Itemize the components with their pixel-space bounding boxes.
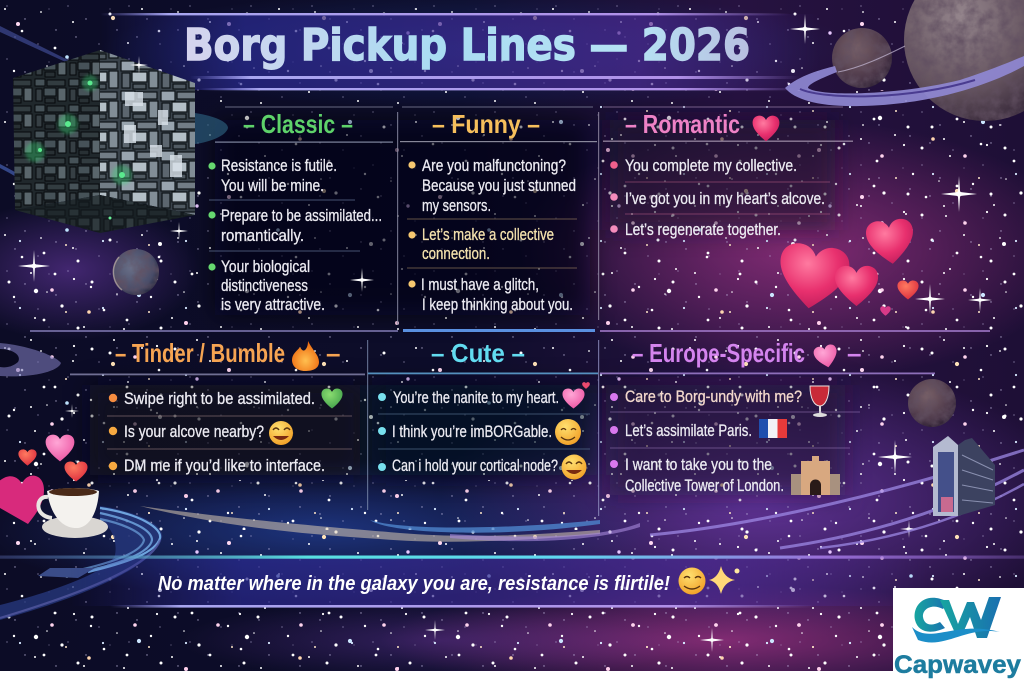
item: europe list: Let’s assimilate Paris.	[625, 422, 752, 440]
swoosh: right streaks	[650, 450, 1024, 548]
icon: upper left ring band	[0, 26, 70, 64]
panel: funny	[397, 106, 597, 325]
heading dash: –	[847, 338, 861, 368]
icon: flame	[292, 341, 319, 371]
item: romantic list: I’ve got you in my heart’s alcove.	[625, 190, 825, 208]
item: europe list	[610, 386, 860, 495]
icon: hearts and coffee cup	[0, 435, 108, 538]
icon: lower left ring band	[0, 164, 60, 205]
item: classic list: Your biological	[221, 258, 310, 276]
icon: moon right	[908, 379, 956, 427]
item: classic list	[208, 157, 382, 314]
item: cute list: Can i hold your cortical node?	[392, 457, 558, 475]
title band	[100, 13, 820, 90]
icon: small galaxy left	[0, 343, 61, 376]
heading: classic: – Classic –	[243, 109, 353, 139]
section divider	[30, 329, 990, 332]
item: tinder list	[107, 388, 352, 475]
item: cute list: You’re the nanite to my heart.	[393, 389, 559, 407]
item: classic list: romantically.	[221, 227, 304, 245]
panel: classic	[208, 106, 393, 314]
item: tinder list: Swipe right to be assimilated.	[124, 390, 315, 408]
logo mark	[912, 597, 1001, 642]
heading: romantic: – Romantic	[625, 109, 740, 139]
heading: tinder bumble: – Tinder / Bumble	[115, 338, 285, 368]
swoosh: centre streak	[140, 506, 640, 542]
panel: tinder bumble	[70, 338, 368, 510]
dark panel backdrops	[90, 120, 845, 495]
heading: cute: – Cute –	[431, 338, 525, 368]
item: europe list: I want to take you to the	[625, 456, 772, 474]
item: funny list: I keep thinking about you.	[422, 296, 573, 314]
item: classic list: You will be mine.	[221, 177, 324, 195]
icon: cube ring	[195, 113, 228, 144]
white bottom strip	[0, 671, 1024, 683]
icon: ringed planets	[785, 0, 1024, 121]
title: Borg Pickup Lines — 2026	[184, 20, 750, 71]
icon: cluster of hearts	[774, 218, 919, 316]
icon: office tower	[933, 436, 995, 516]
item: tinder list: DM me if you’d like to interface.	[124, 457, 325, 475]
item: funny list: connection.	[422, 245, 490, 263]
item: europe list: Collective Tower of London.	[625, 477, 784, 495]
item: tinder list: Is your alcove nearby?	[124, 423, 264, 441]
item: cute list: I think you’re imBORGable.	[392, 423, 552, 441]
icon: Borg cube	[13, 50, 195, 233]
heading: funny: – Funny –	[432, 109, 540, 139]
item: funny list: I must have a glitch,	[421, 276, 539, 294]
panel: europe specific	[600, 338, 935, 495]
icon: romantic heart	[753, 116, 779, 141]
item: funny list	[407, 157, 577, 314]
item: funny list: Let’s make a collective	[422, 226, 554, 244]
icon: europe heart	[813, 343, 840, 370]
item: funny list: Because you just stunned	[422, 177, 576, 195]
item: romantic list	[610, 157, 830, 239]
item: funny list: Are you malfunctoning?	[422, 157, 566, 175]
closing line: No matter where in the galaxy you are, resistance is flirtile!	[158, 573, 670, 595]
item: romantic list: You complete my collective.	[625, 157, 797, 175]
item: classic list: Resistance is futile.	[221, 157, 337, 175]
item: classic list: is very attractive.	[221, 296, 325, 314]
footer band	[0, 556, 1024, 608]
item: cute list	[378, 382, 590, 480]
logo: Capwavey	[893, 588, 1024, 683]
icon: smiling face	[678, 568, 706, 594]
item: romantic list: Let’s regenerate together.	[625, 221, 781, 239]
icon: moon left	[113, 249, 159, 295]
item: classic list: distinctiveness	[221, 277, 308, 295]
panel: romantic	[598, 106, 853, 320]
logo wordmark: Capwavey	[894, 651, 1021, 679]
heading dash: –	[326, 338, 340, 368]
icon: sparkles	[709, 566, 740, 594]
item: europe list: Care to Borg-undy with me?	[625, 388, 802, 406]
heading: europe specific: – Europe-Specific	[632, 338, 805, 368]
item: funny list: my sensors.	[422, 197, 491, 215]
icon: curved road left	[0, 506, 162, 620]
item: classic list: Prepare to be assimilated...	[221, 207, 382, 225]
panel: cute	[368, 338, 599, 516]
